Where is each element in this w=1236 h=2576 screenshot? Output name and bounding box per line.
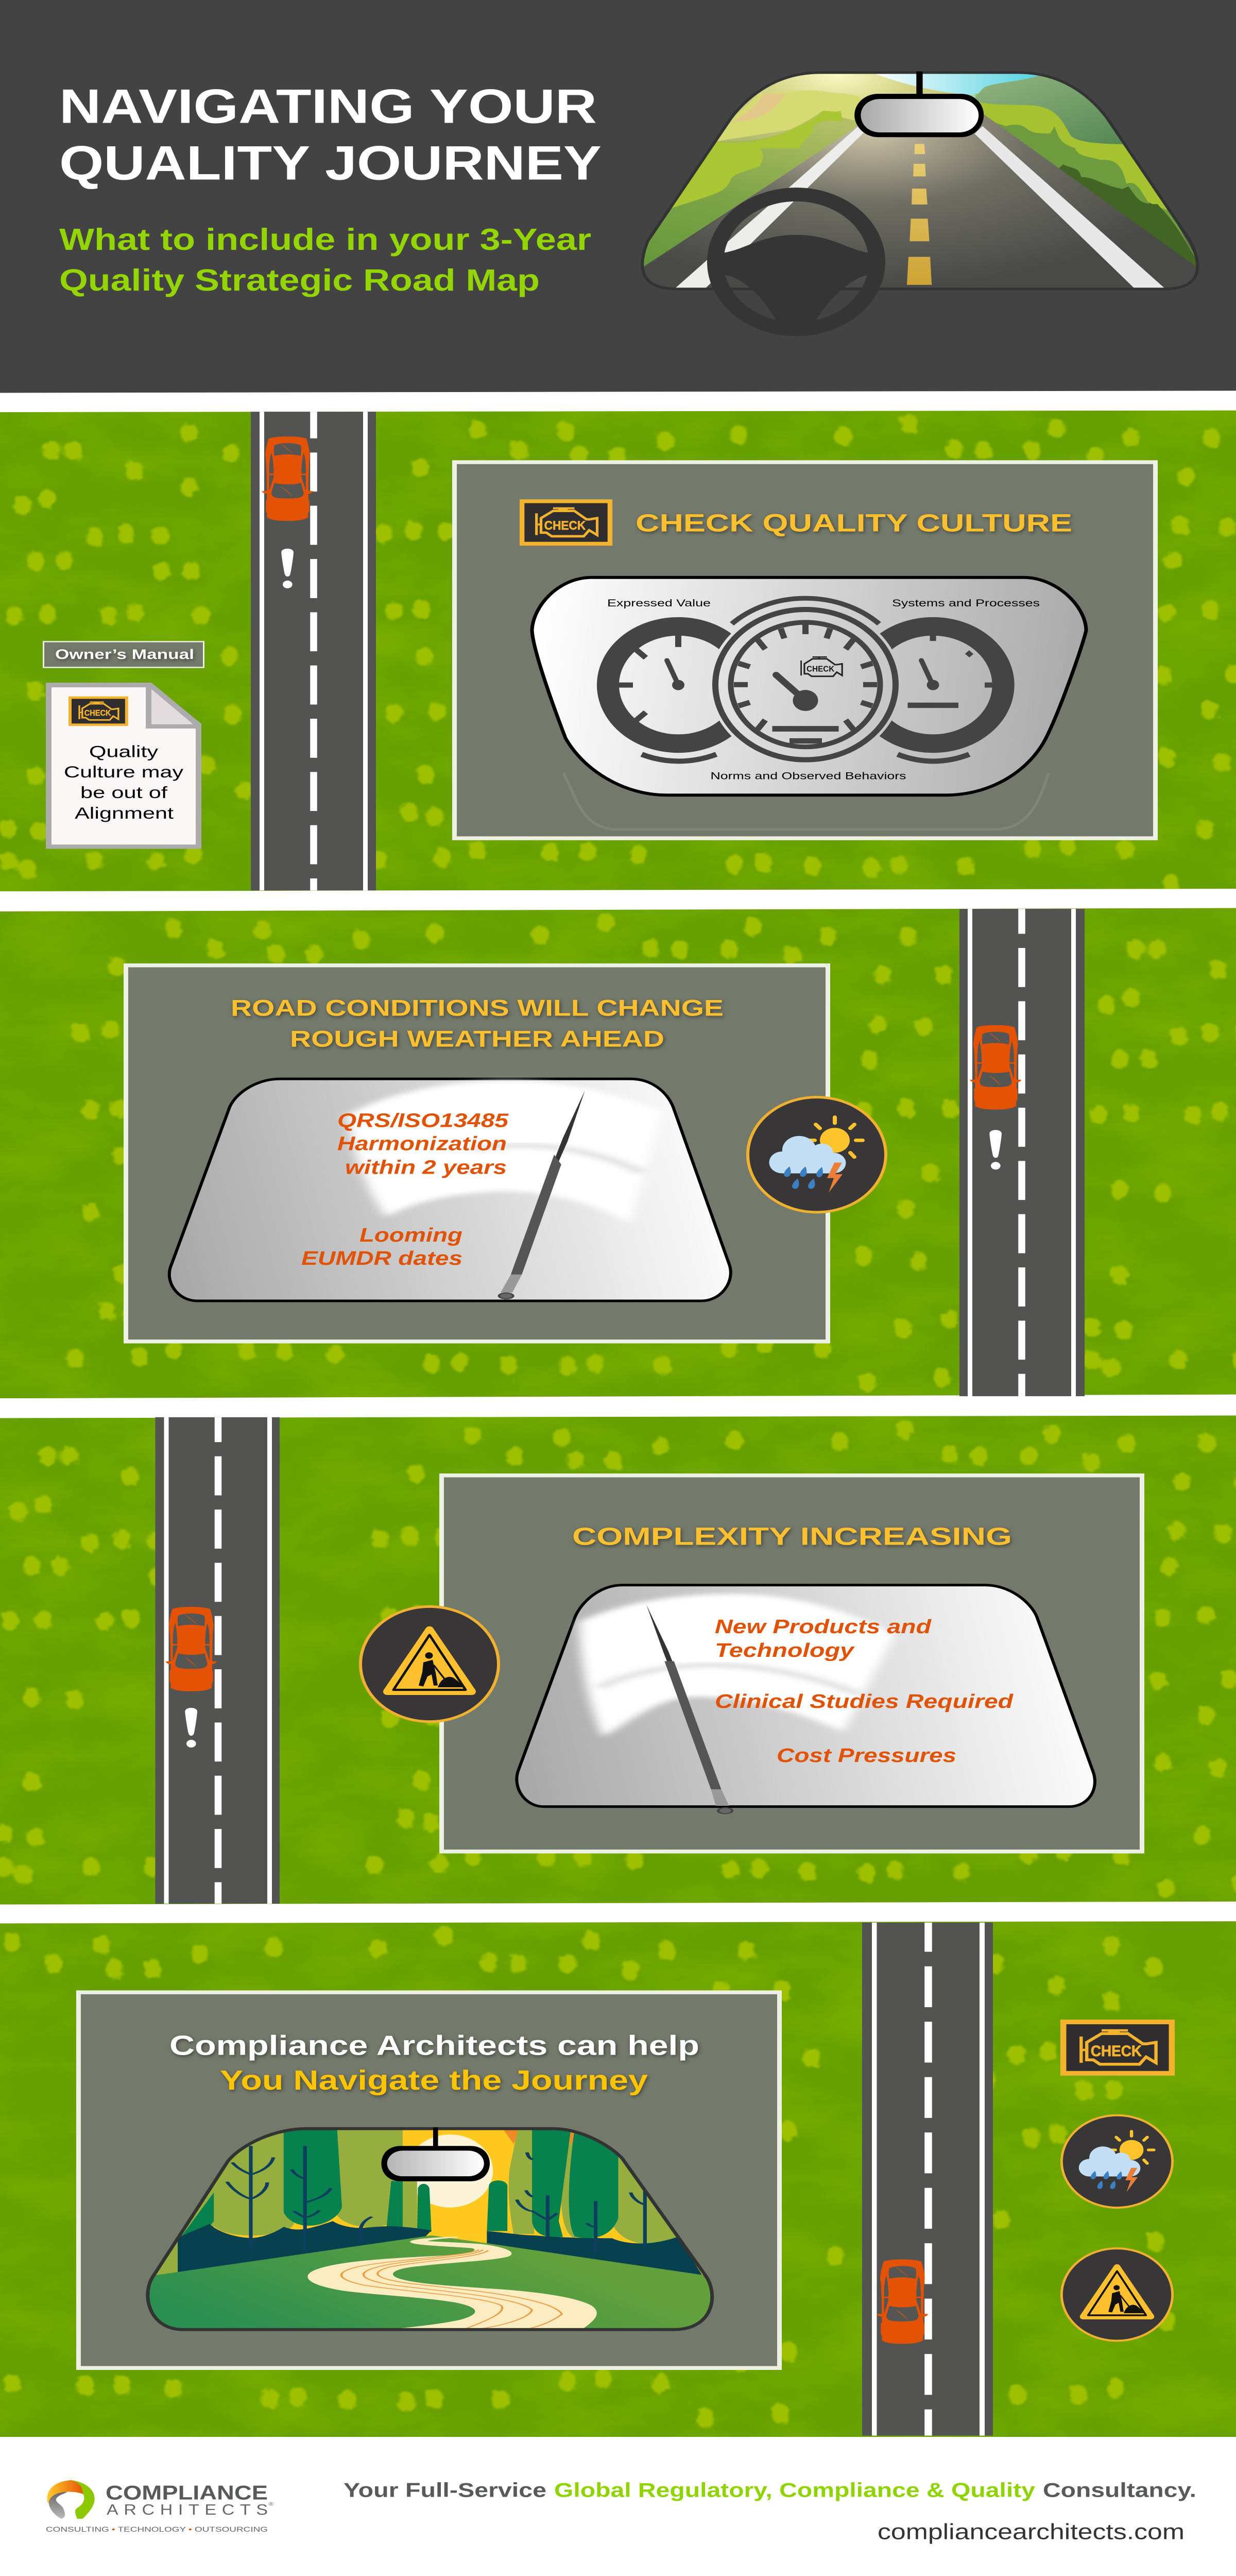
subtitle: [59, 223, 591, 297]
section 4: road with car: [862, 1923, 993, 2436]
footer: logo: CONSULTING • TECHNOLOGY • OUTSOURCING: [46, 2526, 268, 2534]
car: [165, 1607, 217, 1691]
panel: road conditions: [126, 965, 828, 1342]
icon: check engine mini: CHECK: [806, 664, 834, 673]
car: [970, 1025, 1021, 1110]
rear view mirror: [382, 2127, 490, 2181]
exclamation mark: [281, 549, 294, 588]
footer: logo: ®: [269, 2501, 273, 2507]
windshield notes: QRS/ISO13485: [337, 1109, 509, 1132]
manual note: be out of: [80, 784, 167, 802]
windshield notes: [715, 1616, 1014, 1766]
footer: logo: [46, 2480, 273, 2534]
icon: weather: [1061, 2115, 1173, 2208]
rear view mirror: [854, 72, 984, 137]
manual note: Quality: [89, 743, 159, 761]
icon: check engine: [68, 697, 128, 726]
windshield: [169, 1079, 731, 1301]
section 2: green field: [0, 906, 1236, 1400]
left gauge: [608, 626, 749, 761]
section 3: green field: [0, 1413, 1236, 1906]
section 1: green field: [0, 408, 1236, 893]
heading: ROAD CONDITIONS WILL CHANGE: [231, 996, 724, 1021]
heading: CHECK QUALITY CULTURE: [636, 510, 1072, 537]
steering wheel: [715, 195, 877, 329]
logo wordmark: COMPLIANCE: [106, 2482, 268, 2504]
icon: weather: [748, 1097, 886, 1212]
footer: tagline: Consultancy.: [1043, 2479, 1196, 2502]
heading: ROUGH WEATHER AHEAD: [290, 1027, 664, 1052]
footer: tagline: Your Full-Service: [344, 2479, 546, 2502]
footer: website: compliancearchitects.com: [878, 2519, 1184, 2544]
icon: check engine: CHECK: [544, 519, 586, 532]
gauge labels: Norms and Observed Behaviors: [711, 771, 906, 782]
icon: check engine: CHECK: [1091, 2043, 1142, 2059]
heading: Compliance Architects can help: [169, 2029, 699, 2061]
windshield notes: New Products and: [715, 1616, 932, 1637]
windshield notes: Harmonization: [337, 1132, 507, 1155]
title: QUALITY JOURNEY: [59, 136, 602, 190]
manual note: Culture may: [64, 763, 184, 781]
header panel: [0, 0, 1236, 393]
section 1: road with car: [251, 412, 376, 890]
footer: logo: ARCHITECTS: [107, 2501, 268, 2518]
title: NAVIGATING YOUR: [59, 79, 597, 133]
manual note: Alignment: [75, 804, 174, 822]
owner's manual label: [43, 641, 204, 667]
windshield notes: Cost Pressures: [777, 1744, 956, 1766]
gauge labels: Expressed Value: [607, 598, 711, 609]
owner's manual page: [46, 683, 201, 849]
footer: tagline: Global Regulatory, Compliance & Quality: [554, 2479, 1035, 2502]
title: [59, 79, 602, 190]
subtitle: What to include in your 3-Year: [59, 223, 591, 257]
windshield notes: [301, 1109, 509, 1269]
gauge labels: Systems and Processes: [892, 598, 1040, 609]
windscreen illustration: winding forest road: [140, 2127, 719, 2331]
icon: road work: [360, 1606, 499, 1722]
dashboard cluster: [532, 578, 1086, 795]
car: [262, 436, 313, 521]
wiper sweep: [579, 1594, 895, 1737]
windshield notes: EUMDR dates: [301, 1247, 462, 1269]
car: [877, 2260, 928, 2344]
heading: COMPLEXITY INCREASING: [572, 1523, 1012, 1550]
footer: tagline: [344, 2479, 1196, 2502]
manual note: [64, 743, 184, 822]
windshield notes: within 2 years: [345, 1156, 507, 1178]
heading: [169, 2029, 699, 2096]
icon: check engine mini: [801, 657, 842, 676]
windshield: [517, 1585, 1095, 1814]
windshield notes: Clinical Studies Required: [715, 1690, 1014, 1712]
icon: road work: [1061, 2248, 1173, 2341]
icon: check engine: [1060, 2020, 1175, 2076]
gauge labels: [607, 598, 1040, 782]
icon: check engine: [520, 499, 612, 546]
panel: check quality culture: [454, 462, 1156, 838]
owner's manual label: Owner’s Manual: [55, 647, 194, 663]
subtitle: Quality Strategic Road Map: [59, 263, 540, 297]
panel: compliance architects can help: [78, 1992, 780, 2368]
heading: You Navigate the Journey: [220, 2064, 648, 2096]
panel: complexity increasing: [442, 1476, 1142, 1852]
windshield notes: Looming: [359, 1224, 462, 1246]
section 3: road with car: [156, 1417, 280, 1904]
wiper blade: [499, 1091, 585, 1299]
wiper sweep: [347, 1080, 662, 1224]
exclamation mark: [989, 1130, 1002, 1170]
wiper blade: [646, 1605, 732, 1814]
windshield notes: Technology: [715, 1639, 855, 1661]
center gauge: [709, 598, 902, 765]
icon: check engine: CHECK: [84, 709, 111, 718]
right gauge: [863, 626, 1003, 761]
heading: [231, 996, 724, 1052]
exclamation mark: [185, 1708, 197, 1748]
section 4: green field: [0, 1919, 1236, 2438]
section 2: road with car: [959, 909, 1085, 1396]
windscreen illustration: road ahead: [618, 69, 1205, 329]
logo mark: [47, 2480, 95, 2519]
